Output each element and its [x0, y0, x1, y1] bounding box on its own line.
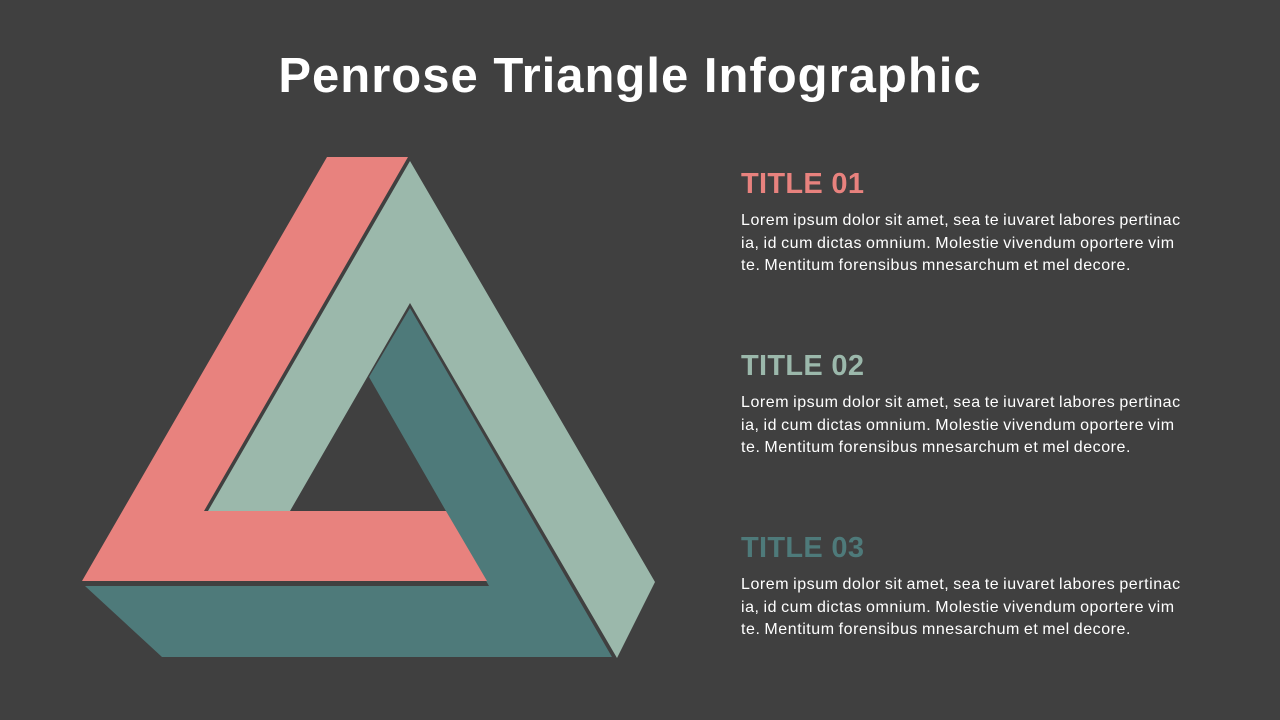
text block 02: TITLE 02 [741, 350, 864, 382]
text block 01: ia, id cum dictas omnium. Molestie vivendum oportere vim [741, 234, 1175, 252]
text block 01 [741, 168, 1181, 274]
text block 02 [741, 350, 1181, 456]
penrose triangle [82, 157, 655, 658]
segment: teal [85, 308, 612, 657]
text block 02: Lorem ipsum dolor sit amet, sea te iuvaret labores pertinac [741, 394, 1181, 411]
text block 03: TITLE 03 [741, 532, 864, 564]
text block 03: ia, id cum dictas omnium. Molestie vivendum oportere vim [741, 598, 1175, 616]
text block 01: Lorem ipsum dolor sit amet, sea te iuvaret labores pertinac [741, 212, 1181, 229]
text block 02: te. Mentitum forensibus mnesarchum et mel decore. [741, 439, 1131, 456]
text block 01: TITLE 01 [741, 168, 864, 200]
title: Penrose Triangle Infographic [278, 49, 982, 103]
text block 01: te. Mentitum forensibus mnesarchum et mel decore. [741, 257, 1131, 274]
text block 03: te. Mentitum forensibus mnesarchum et mel decore. [741, 621, 1131, 638]
text block 03: Lorem ipsum dolor sit amet, sea te iuvaret labores pertinac [741, 576, 1181, 593]
segment: pink [82, 157, 487, 581]
text block 03 [741, 532, 1181, 638]
text block 02: ia, id cum dictas omnium. Molestie vivendum oportere vim [741, 416, 1175, 434]
segment: sage [208, 161, 655, 658]
